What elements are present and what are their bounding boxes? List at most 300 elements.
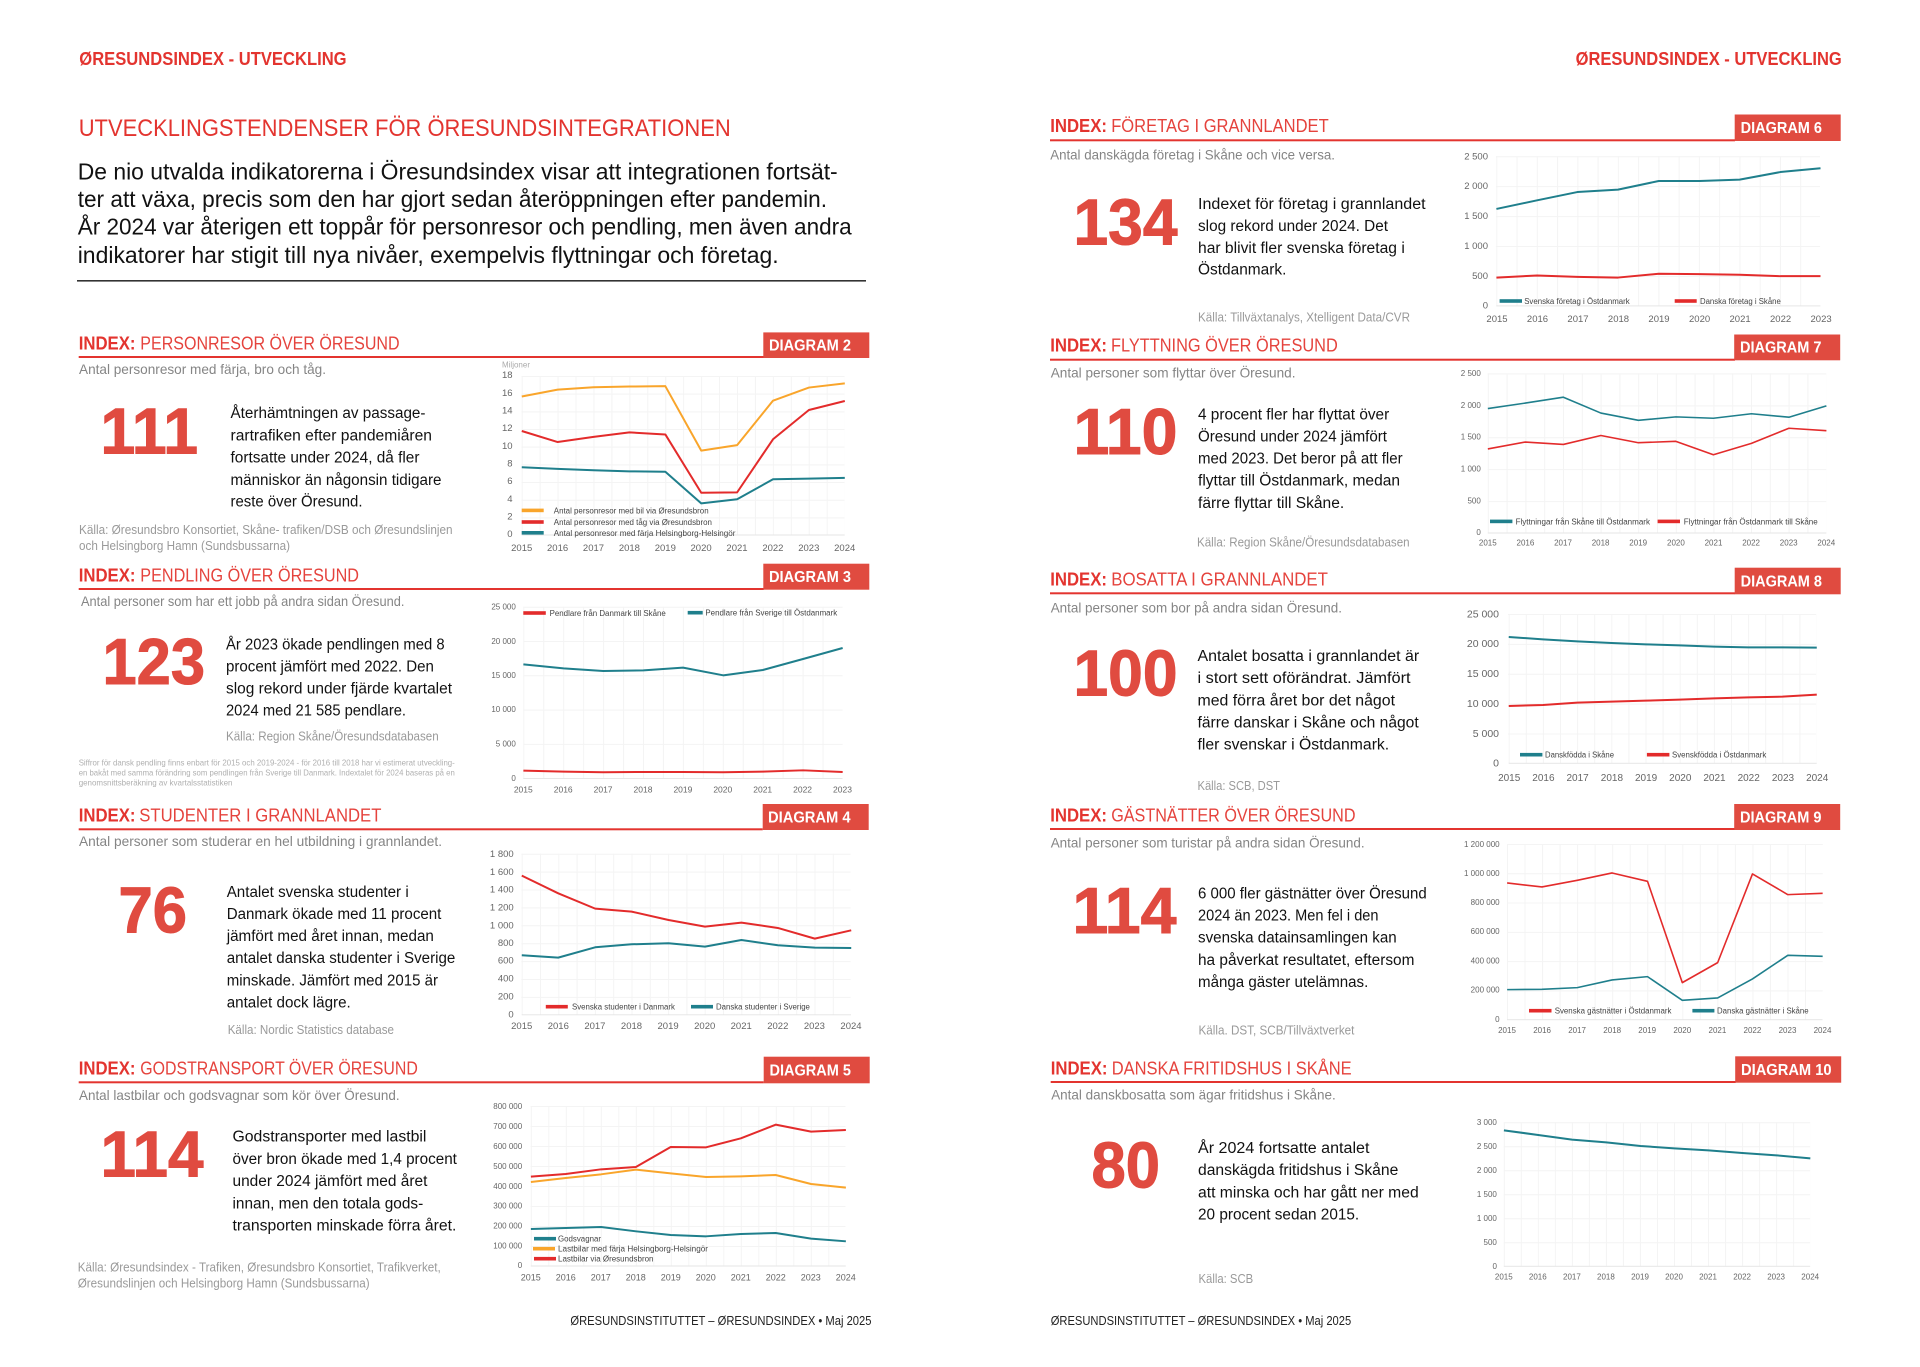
body text: under 2024 jämfört med året <box>232 1173 428 1190</box>
body text: Antalet bosatta i grannlandet är <box>1198 648 1419 665</box>
source: Källa: SCB <box>1198 1272 1253 1286</box>
line chart: godstransport: Lastbilar med färja Helsingborg-Helsingör <box>558 1245 708 1254</box>
line chart: företag: 1 500 <box>1464 211 1488 222</box>
line chart: studenter: 2023 <box>804 1021 825 1032</box>
line chart: fritidshus: 1 000 <box>1477 1214 1497 1223</box>
line chart: flyttning: 2022 <box>1742 539 1761 548</box>
body text: antalet danska studenter i Sverige <box>227 950 455 967</box>
line chart: fritidshus: 2021 <box>1699 1273 1717 1282</box>
heading: INDEX: <box>79 806 136 826</box>
line chart: bosatta: 2019 <box>1635 773 1658 784</box>
heading: INDEX: <box>79 334 136 354</box>
body text: har blivit fler svenska företag i <box>1198 240 1405 257</box>
heading: GÄSTNÄTTER ÖVER ÖRESUND <box>1111 805 1356 825</box>
source: Øresundslinjen och Helsingborg Hamn (Sundsbussarna) <box>78 1277 370 1291</box>
line chart: bosatta: 2018 <box>1601 773 1623 784</box>
heading: INDEX: <box>1050 336 1107 356</box>
body text: färre danskar i Skåne och något <box>1198 714 1419 731</box>
body text: över bron ökade med 1,4 procent <box>232 1151 458 1168</box>
heading: BOSATTA I GRANNLANDET <box>1111 569 1328 589</box>
line chart: personresor: 2017 <box>583 543 604 554</box>
body text: 6 000 fler gästnätter över Öresund <box>1198 884 1427 902</box>
line chart: företag <box>1464 152 1832 325</box>
subtitle: Antal lastbilar och godsvagnar som kör över Öresund. <box>79 1086 400 1103</box>
subtitle: Antal personer som studerar en hel utbildning i grannlandet. <box>79 833 442 849</box>
line chart: godstransport <box>493 1102 856 1282</box>
line chart: personresor: 2022 <box>762 543 783 554</box>
line chart: studenter: 600 <box>498 956 514 967</box>
line chart: flyttning: 2 000 <box>1461 401 1481 410</box>
line chart: flyttning: 2016 <box>1517 539 1535 548</box>
body text <box>1198 1140 1419 1223</box>
body text: människor än någonsin tidigare <box>230 472 442 489</box>
line chart: bosatta: 25 000 <box>1467 608 1499 620</box>
heading: PENDLING ÖVER ÖRESUND <box>140 565 359 585</box>
line chart: pendling: 2017 <box>594 784 613 794</box>
line chart: godstransport: 2023 <box>801 1272 821 1282</box>
heading: PERSONRESOR ÖVER ÖRESUND <box>140 334 400 354</box>
lead paragraph <box>78 158 853 268</box>
footnote: Siffror för dansk pendling finns enbart för 2015 och 2019-2024 - för 2016 till 2018 har vi estimerat utveckling- <box>79 757 455 767</box>
line chart: bosatta: 5 000 <box>1473 728 1499 740</box>
body text: 4 procent fler har flyttat över <box>1198 406 1389 424</box>
line chart: bosatta: 20 000 <box>1467 638 1499 650</box>
body text: minskade. Jämfört med 2015 är <box>227 973 438 990</box>
source: Källa: SCB, DST <box>1198 779 1280 793</box>
heading: GODSTRANSPORT ÖVER ÖRESUND <box>140 1058 418 1078</box>
line chart: flyttning: Flyttningar från Östdanmark till Skåne <box>1684 517 1818 526</box>
source: Källa. DST, SCB/Tillväxtverket <box>1198 1023 1355 1037</box>
line chart: bosatta: Svenskfödda i Östdanmark <box>1672 751 1767 760</box>
source: Källa: Region Skåne/Öresundsdatabasen <box>1197 536 1410 550</box>
line chart: personresor: 2023 <box>798 543 819 554</box>
index number: 111 <box>100 394 198 467</box>
body text: År 2023 ökade pendlingen med 8 <box>226 636 445 653</box>
line chart: studenter: 1 400 <box>490 885 514 896</box>
line chart: gästnätter: 2016 <box>1533 1026 1552 1035</box>
line chart: pendling: 25 000 <box>491 602 516 612</box>
line chart: flyttning: 2020 <box>1667 539 1685 548</box>
subtitle: Antal danskägda företag i Skåne och vice versa. <box>1050 146 1335 162</box>
line chart: personresor: Antal personresor med färja Helsingborg-Helsingör <box>554 529 736 538</box>
heading: DANSKA FRITIDSHUS I SKÅNE <box>1112 1058 1352 1078</box>
body text: fortsatte under 2024, då fler <box>230 450 420 467</box>
badge: diagram 2: DIAGRAM 2 <box>769 338 851 354</box>
body text: Danmark ökade med 11 procent <box>227 906 442 923</box>
line chart: gästnätter: 2017 <box>1568 1026 1587 1035</box>
line chart: fritidshus: 500 <box>1484 1238 1497 1247</box>
heading: INDEX: <box>1051 1058 1108 1078</box>
line chart: gästnätter: 2015 <box>1498 1026 1516 1035</box>
badge: diagram 5 <box>764 1057 870 1083</box>
line chart: fritidshus: 2017 <box>1563 1273 1581 1282</box>
line chart: bosatta: 2021 <box>1703 773 1726 784</box>
line chart: godstransport: 2017 <box>591 1272 611 1282</box>
body text: slog rekord under 2024. Det <box>1198 218 1389 235</box>
badge: diagram 6: DIAGRAM 6 <box>1741 120 1822 137</box>
line chart: företag: Danska företag i Skåne <box>1700 297 1781 306</box>
line chart: studenter: 400 <box>498 974 514 985</box>
heading: INDEX: <box>1050 569 1107 589</box>
line chart: fritidshus: 0 <box>1492 1262 1497 1271</box>
line chart: gästnätter: 600 000 <box>1471 927 1500 936</box>
line chart: godstransport: 2016 <box>556 1272 576 1282</box>
body text: jämfört med året innan, medan <box>226 928 434 945</box>
panel: gästnätter <box>1050 804 1840 1037</box>
line chart: personresor: 16 <box>502 388 513 399</box>
line chart: studenter: 2022 <box>767 1021 788 1032</box>
body text: att minska och har gått ner med <box>1198 1184 1419 1201</box>
line chart: bosatta: 2024 <box>1806 773 1829 784</box>
line chart: pendling: 15 000 <box>491 671 516 680</box>
page header left: ØRESUNDSINDEX - UTVECKLING <box>79 49 347 69</box>
heading: STUDENTER I GRANNLANDET <box>139 806 381 826</box>
line chart: godstransport: 800 000 <box>493 1102 523 1111</box>
body text: Återhämtningen av passage- <box>230 405 426 422</box>
line chart: flyttning: 2015 <box>1479 539 1497 548</box>
panel: bosatta <box>1050 568 1841 793</box>
heading: FÖRETAG I GRANNLANDET <box>1111 116 1329 136</box>
heading: INDEX: <box>1050 805 1107 825</box>
badge: diagram 5: DIAGRAM 5 <box>770 1062 851 1079</box>
body text: 2024 än 2023. Men fel i den <box>1198 908 1378 925</box>
line chart: bosatta: 2015 <box>1498 773 1521 784</box>
line chart: bosatta: 2020 <box>1669 773 1692 784</box>
badge: diagram 3 <box>763 564 869 590</box>
subtitle: Antal personer som har ett jobb på andra sidan Öresund. <box>81 592 404 609</box>
body text <box>232 1129 458 1234</box>
source: Källa: Nordic Statistics database <box>228 1023 394 1037</box>
line chart: personresor: 2020 <box>691 543 712 554</box>
page header right: ØRESUNDSINDEX - UTVECKLING <box>1576 49 1842 69</box>
line chart: personresor <box>502 360 855 554</box>
line chart: bosatta: 2016 <box>1532 773 1555 784</box>
line chart: godstransport: 500 000 <box>493 1162 523 1171</box>
line chart: fritidshus: 2018 <box>1597 1273 1615 1282</box>
line chart: gästnätter: 2024 <box>1814 1026 1832 1035</box>
line chart: studenter: 1 200 <box>490 903 514 914</box>
badge: diagram 4: DIAGRAM 4 <box>768 809 851 826</box>
line chart: flyttning: 2 500 <box>1461 369 1481 378</box>
body text: med 2023. Det beror på att fler <box>1198 450 1403 468</box>
line chart: flyttning: 2018 <box>1592 539 1610 548</box>
line chart: gästnätter: Svenska gästnätter i Östdanmark <box>1555 1007 1672 1016</box>
line chart: pendling: 20 000 <box>491 637 516 646</box>
body text: slog rekord under fjärde kvartalet <box>226 680 453 697</box>
line chart: fritidshus <box>1477 1118 1820 1282</box>
line chart: gästnätter: 2019 <box>1638 1026 1657 1035</box>
line chart: pendling: 2020 <box>713 784 733 794</box>
line chart: godstransport: 2022 <box>766 1272 786 1282</box>
line chart: pendling: 2022 <box>793 784 812 794</box>
line chart: godstransport: 100 000 <box>493 1242 523 1250</box>
line chart: bosatta: 15 000 <box>1467 668 1499 680</box>
line chart: pendling: 2023 <box>833 784 852 794</box>
body text: reste över Öresund. <box>230 493 362 511</box>
source: Källa: Øresundsindex - Trafiken, Øresundsbro Konsortiet, Trafikverket, <box>78 1261 441 1275</box>
line chart: företag: 2020 <box>1689 314 1710 325</box>
index number: 114 <box>1072 874 1176 947</box>
line chart: företag: 2021 <box>1730 314 1751 325</box>
index number: 123 <box>102 625 205 698</box>
line chart: gästnätter: 1 200 000 <box>1464 840 1500 849</box>
line chart: företag: 2 500 <box>1464 152 1488 162</box>
body text: svenska datainsamlingen kan <box>1198 930 1397 947</box>
line chart: bosatta: 0 <box>1493 758 1499 770</box>
source: Källa: Tillväxtanalys, Xtelligent Data/CVR <box>1198 311 1410 325</box>
heading: FLYTTNING ÖVER ÖRESUND <box>1111 336 1338 356</box>
line chart: fritidshus: 2020 <box>1665 1273 1683 1282</box>
body text: procent jämfört med 2022. Den <box>226 659 434 676</box>
footnote: en bakåt med samma förändring som pendlingen från Sverige till Danmark. Indextalet för 2024 baseras på en <box>79 767 455 777</box>
line chart: pendling: Pendlare från Danmark till Skåne <box>550 609 666 618</box>
line chart: godstransport: 600 000 <box>493 1142 523 1151</box>
line chart: studenter: 2020 <box>694 1021 715 1032</box>
line chart: fritidshus: 2022 <box>1733 1273 1752 1282</box>
line chart: personresor: 2024 <box>834 543 855 554</box>
line chart: flyttning: 2019 <box>1629 539 1648 548</box>
line chart: gästnätter: 200 000 <box>1471 986 1500 994</box>
panel: flyttning <box>1050 334 1840 550</box>
line chart: bosatta: 10 000 <box>1467 698 1499 710</box>
line chart: företag: 500 <box>1472 271 1488 282</box>
footer right: ØRESUNDSINSTITUTTET – ØRESUNDSINDEX • Maj 2025 <box>1051 1313 1351 1328</box>
line chart: gästnätter: 2021 <box>1709 1026 1727 1035</box>
line chart: pendling: 2015 <box>514 784 533 794</box>
line chart: företag: 2019 <box>1648 314 1670 325</box>
footnote: genomsnittsberäkning av kvartalsstatistiken <box>79 777 233 787</box>
line chart: godstransport: 2018 <box>626 1272 646 1282</box>
body text: Antalet svenska studenter i <box>227 884 409 901</box>
line chart: bosatta: 2023 <box>1772 773 1795 784</box>
body text: innan, men den totala gods- <box>232 1195 423 1212</box>
line chart: företag: 1 000 <box>1464 241 1488 252</box>
line chart: företag: Svenska företag i Östdanmark <box>1524 297 1631 306</box>
line chart: studenter: 2024 <box>840 1021 862 1032</box>
source <box>78 1261 441 1291</box>
line chart: flyttning: 0 <box>1476 528 1481 537</box>
index number: 80 <box>1092 1128 1160 1201</box>
line chart: fritidshus: 2016 <box>1529 1273 1547 1282</box>
line chart: gästnätter: 800 000 <box>1471 898 1500 907</box>
body text: Godstransporter med lastbil <box>232 1129 426 1146</box>
line chart: personresor: 2016 <box>547 543 568 554</box>
line chart: godstransport: 2020 <box>696 1272 716 1282</box>
body text <box>1198 648 1419 753</box>
line chart: studenter: 1 000 <box>490 920 514 931</box>
line chart: personresor: 2 <box>507 512 513 522</box>
line chart: pendling: 2016 <box>554 784 573 794</box>
line chart: personresor: 2019 <box>655 543 676 554</box>
line chart: gästnätter: 400 000 <box>1471 956 1500 966</box>
line chart: personresor: 4 <box>507 494 513 505</box>
line chart: fritidshus: 2019 <box>1631 1273 1649 1282</box>
line chart: personresor: Antal personresor med bil via Øresundsbron <box>554 506 709 515</box>
line chart: företag: 2018 <box>1608 314 1629 325</box>
line chart: fritidshus: 2023 <box>1767 1273 1786 1282</box>
body text <box>230 405 442 511</box>
badge: diagram 8: DIAGRAM 8 <box>1741 573 1822 590</box>
body text: fler svenskar i Östdanmark. <box>1198 735 1389 753</box>
line chart: personresor: Antal personresor med tåg via Øresundsbron <box>554 518 712 527</box>
line chart: studenter: Danska studenter i Sverige <box>716 1003 810 1012</box>
footer left: ØRESUNDSINSTITUTTET – ØRESUNDSINDEX • Maj 2025 <box>570 1313 872 1328</box>
body text: transporten minskade förra året. <box>232 1217 456 1234</box>
line chart: företag: 0 <box>1483 300 1488 312</box>
line chart: fritidshus: 1 500 <box>1477 1190 1497 1199</box>
line chart: studenter: 2017 <box>584 1021 605 1032</box>
body text: färre flyttar till Skåne. <box>1198 495 1344 512</box>
line chart: studenter: 2015 <box>511 1021 532 1032</box>
line chart: godstransport: 2021 <box>731 1272 751 1282</box>
line chart: flyttning: 2024 <box>1817 539 1836 548</box>
line chart: studenter: 2021 <box>731 1021 752 1032</box>
panel: personresor <box>79 332 869 554</box>
line chart: studenter: 200 <box>498 991 514 1002</box>
index number: 76 <box>118 873 187 946</box>
line chart: godstransport: 700 000 <box>493 1122 523 1131</box>
body text: antalet dock lägre. <box>227 995 351 1012</box>
line chart: gästnätter: 2020 <box>1673 1026 1692 1035</box>
index number: 110 <box>1074 395 1178 468</box>
body text: i stort sett oförändrat. Jämfört <box>1198 670 1411 687</box>
line chart: personresor: 6 <box>507 476 513 487</box>
line chart: godstransport: Godsvagnar <box>558 1235 601 1244</box>
badge: diagram 10 <box>1735 1056 1841 1083</box>
line chart: pendling: 10 000 <box>491 705 516 714</box>
subtitle: Antal personresor med färja, bro och tåg. <box>79 361 326 377</box>
line chart: personresor: 12 <box>502 423 513 434</box>
line chart: gästnätter: 0 <box>1495 1015 1500 1024</box>
body text: 2024 med 21 585 pendlare. <box>226 703 406 720</box>
line chart: personresor: 14 <box>502 406 513 416</box>
badge: diagram 7 <box>1734 334 1840 360</box>
body text <box>1198 406 1403 512</box>
main title: UTVECKLINGSTENDENSER FÖR ÖRESUNDSINTEGRATIONEN <box>79 115 731 142</box>
line chart: godstransport: 2024 <box>836 1272 856 1282</box>
line chart: godstransport: 400 000 <box>493 1182 523 1191</box>
body text <box>226 636 453 720</box>
subtitle: Antal personer som bor på andra sidan Öresund. <box>1051 599 1342 616</box>
badge: diagram 2 <box>763 332 869 358</box>
line chart: företag: 2023 <box>1811 314 1832 325</box>
line chart: personresor: 2021 <box>726 543 748 554</box>
line chart: gästnätter: 1 000 000 <box>1464 869 1500 878</box>
line chart: studenter: 800 <box>498 938 514 949</box>
line chart: pendling <box>491 602 852 794</box>
badge: diagram 10: DIAGRAM 10 <box>1741 1062 1832 1079</box>
line chart: gästnätter: 2022 <box>1744 1026 1762 1035</box>
lead paragraph: ter att växa, precis som den har gjort sedan återöppningen efter pandemin. <box>78 186 827 212</box>
line chart: studenter: 1 800 <box>490 849 514 860</box>
line chart: pendling: 2018 <box>634 784 653 794</box>
line chart: flyttning <box>1461 369 1836 548</box>
body text: rartrafiken efter pandemiåren <box>230 428 432 445</box>
line chart: godstransport: 300 000 <box>493 1202 523 1210</box>
badge: diagram 4 <box>763 804 869 830</box>
line chart: studenter: 2016 <box>548 1021 569 1032</box>
body text: med förra året bor det något <box>1198 692 1396 709</box>
line chart: gästnätter: 2018 <box>1603 1026 1622 1035</box>
body text: många gäster utelämnas. <box>1198 974 1368 991</box>
badge: diagram 8 <box>1735 568 1841 594</box>
line chart: fritidshus: 2 000 <box>1477 1166 1497 1175</box>
subtitle: Antal personer som flyttar över Öresund. <box>1051 364 1296 381</box>
body text <box>226 884 455 1012</box>
panel: pendling <box>79 564 869 794</box>
badge: diagram 9: DIAGRAM 9 <box>1740 809 1822 826</box>
line chart: godstransport: 2015 <box>521 1272 541 1282</box>
line chart: fritidshus: 2024 <box>1801 1273 1820 1282</box>
line chart: företag: 2022 <box>1770 314 1791 325</box>
badge: diagram 9 <box>1734 804 1840 830</box>
body text: 20 procent sedan 2015. <box>1198 1206 1359 1223</box>
index number: 114 <box>100 1118 204 1191</box>
line chart: godstransport: 200 000 <box>493 1222 523 1230</box>
line chart: studenter: 2018 <box>621 1021 642 1032</box>
badge: diagram 7: DIAGRAM 7 <box>1740 340 1822 356</box>
line chart: bosatta: 2022 <box>1738 773 1760 784</box>
heading: INDEX: <box>79 565 136 585</box>
index number: 134 <box>1074 186 1178 258</box>
body text: Östdanmark. <box>1198 261 1286 279</box>
line chart: pendling: 5 000 <box>496 740 516 748</box>
index number: 100 <box>1074 636 1178 709</box>
body text: danskägda fritidshus i Skåne <box>1198 1162 1398 1179</box>
source <box>79 523 453 553</box>
line chart: fritidshus: 2015 <box>1495 1273 1513 1282</box>
line chart: personresor: 8 <box>507 458 513 470</box>
line chart: personresor: 2015 <box>511 543 532 554</box>
badge: diagram 3: DIAGRAM 3 <box>769 569 851 586</box>
line chart: flyttning: 2017 <box>1554 539 1572 548</box>
line chart: flyttning: 1 000 <box>1461 464 1481 473</box>
line chart: godstransport: 0 <box>518 1261 523 1270</box>
heading: INDEX: <box>79 1058 136 1078</box>
line chart: personresor: 0 <box>507 529 513 540</box>
line chart: personresor: 18 <box>502 370 513 381</box>
source: Källa: Region Skåne/Öresundsdatabasen <box>226 729 439 743</box>
line chart: bosatta <box>1467 608 1829 784</box>
line chart: pendling: 2021 <box>753 784 772 794</box>
line chart: företag: 2016 <box>1527 314 1548 325</box>
lead paragraph: År 2024 var återigen ett toppår för personresor och pendling, men även andra <box>78 212 853 240</box>
line chart: personresor: Miljoner <box>502 360 530 370</box>
panel: företag <box>1050 114 1841 325</box>
line chart: flyttning: 2023 <box>1780 539 1798 548</box>
body text: År 2024 fortsatte antalet <box>1198 1140 1370 1157</box>
line chart: bosatta: Danskfödda i Skåne <box>1545 751 1615 760</box>
panel: godstransport <box>78 1057 870 1291</box>
subtitle: Antal personer som turistar på andra sidan Öresund. <box>1051 833 1365 850</box>
source: och Helsingborg Hamn (Sundsbussarna) <box>79 539 290 553</box>
body text: ha påverkat resultatet, eftersom <box>1198 952 1414 969</box>
panel: fritidshus <box>1051 1056 1841 1286</box>
lead paragraph: indikatorer har stigit till nya nivåer, exempelvis flyttningar och företag. <box>78 242 779 268</box>
line chart: studenter: Svenska studenter i Danmark <box>572 1003 676 1012</box>
line chart: fritidshus: 3 000 <box>1477 1118 1497 1127</box>
body text: flyttar till Östdanmark, medan <box>1198 472 1400 490</box>
line chart: godstransport: 2019 <box>661 1272 681 1282</box>
line chart: godstransport: Lastbilar via Øresundsbron <box>558 1255 654 1264</box>
body text <box>1198 196 1426 279</box>
line chart: flyttning: Flyttningar från Skåne till Östdanmark <box>1516 517 1651 526</box>
line chart: gästnätter: 2023 <box>1779 1026 1797 1035</box>
line chart: gästnätter: Danska gästnätter i Skåne <box>1717 1007 1809 1016</box>
body text: Öresund under 2024 jämfört <box>1198 428 1388 446</box>
panel: studenter <box>79 804 869 1037</box>
line chart: pendling: 2019 <box>673 784 693 794</box>
